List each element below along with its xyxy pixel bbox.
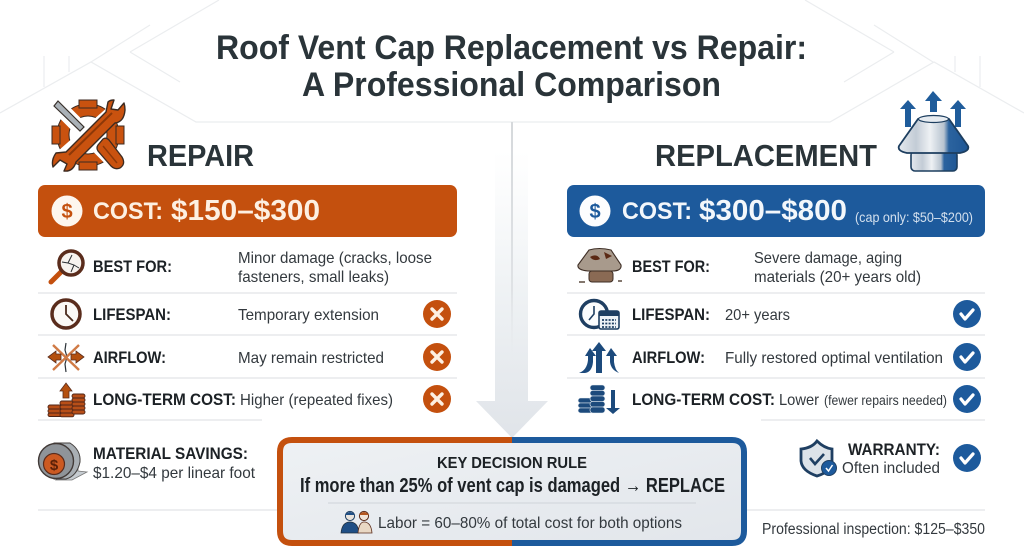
row: warranty: Often included [842, 460, 940, 477]
row: best for: BEST FOR: [632, 257, 710, 276]
cost banner: replacement: $300–$800 [699, 195, 847, 227]
panel: repair [38, 100, 457, 510]
row: long-term cost [578, 385, 981, 414]
row: long-term cost: LONG-TERM COST: [93, 390, 236, 409]
row: best for: fasteners, small leaks) [238, 269, 389, 286]
row: lifespan [52, 300, 451, 328]
cost banner: replacement [567, 185, 985, 237]
icon: metal roll with dollar: $ [50, 457, 59, 474]
icon: two workers [341, 511, 372, 533]
icon: check mark [953, 343, 981, 371]
icon: clock and calendar [580, 300, 619, 329]
icon: check mark [953, 300, 981, 328]
callout: key decision rule: Labor = 60–80% of total cost for both options [378, 515, 682, 532]
row: long-term cost: LONG-TERM COST: [632, 390, 775, 409]
row: material savings: $1.20–$4 per linear foot [93, 465, 256, 482]
cost banner: repair: $150–$300 [171, 195, 320, 227]
icon: wrench, screwdriver and gear [52, 100, 125, 171]
icon: check mark [953, 444, 981, 472]
icon: roof vent cap with arrows [899, 91, 968, 171]
panel: replacement [567, 91, 985, 538]
icon: coin stacks with down arrow [578, 385, 620, 414]
icon: x mark [423, 300, 451, 328]
row: airflow: Fully restored optimal ventilation [725, 350, 943, 367]
row: best for [578, 248, 921, 286]
row: airflow: AIRFLOW: [632, 348, 705, 367]
heading: replacement: REPLACEMENT [655, 138, 877, 173]
row: airflow: AIRFLOW: [93, 348, 166, 367]
row: best for: BEST FOR: [93, 257, 172, 276]
callout: key decision rule: KEY DECISION RULE [437, 455, 587, 472]
icon: x mark [423, 385, 451, 413]
row: lifespan: LIFESPAN: [632, 305, 710, 324]
callout: key decision rule: If more than 25% of vent cap is damaged → REPLACE [300, 475, 725, 497]
row: lifespan: Temporary extension [238, 307, 379, 324]
row: best for: Minor damage (cracks, loose [238, 250, 432, 267]
icon: upward airflow arrows [579, 342, 619, 373]
callout: key decision rule [280, 440, 744, 543]
row: best for: materials (20+ years old) [754, 269, 921, 286]
row: best for [51, 250, 432, 286]
row: long-term cost: Lower [779, 392, 820, 409]
icon: blocked airflow [48, 343, 84, 372]
row: long-term cost: (fewer repairs needed) [824, 393, 947, 408]
cost banner: repair: $ [61, 201, 73, 223]
row: long-term cost: Higher (repeated fixes) [240, 392, 393, 409]
row: lifespan: LIFESPAN: [93, 305, 171, 324]
icon: metal roll with dollar [38, 443, 87, 480]
row: material savings: MATERIAL SAVINGS: [93, 444, 248, 463]
icon: shield with check [801, 441, 836, 476]
row: warranty: WARRANTY: [848, 440, 940, 459]
icon: x mark [423, 343, 451, 371]
icon: coin stacks with up arrow [48, 383, 85, 417]
icon: rusted vent cap [578, 248, 622, 282]
row: material savings [38, 443, 256, 482]
title [216, 29, 807, 104]
center arrow [476, 122, 548, 438]
cost banner: repair [38, 185, 457, 237]
row: long-term cost [48, 383, 451, 417]
icon: clock [52, 300, 80, 328]
title: Roof Vent Cap Replacement vs Repair: [216, 29, 807, 67]
row: best for: Severe damage, aging [754, 250, 902, 267]
row: lifespan [580, 300, 981, 329]
row: airflow [48, 343, 451, 372]
row: lifespan: 20+ years [725, 307, 790, 324]
icon: check mark [953, 385, 981, 413]
cost banner: replacement: $ [589, 201, 601, 223]
footnote: professional inspection: Professional inspection: $125–$350 [762, 521, 985, 538]
title: A Professional Comparison [302, 66, 721, 104]
cost banner: replacement: COST: [622, 198, 692, 225]
row: airflow: May remain restricted [238, 350, 384, 367]
row: warranty [801, 440, 981, 477]
row: airflow [579, 342, 981, 373]
icon: magnifier with crack [51, 251, 83, 282]
cost banner: replacement: (cap only: $50–$200) [855, 209, 973, 225]
cost banner: repair: COST: [93, 198, 163, 225]
heading: repair: REPAIR [147, 138, 254, 173]
